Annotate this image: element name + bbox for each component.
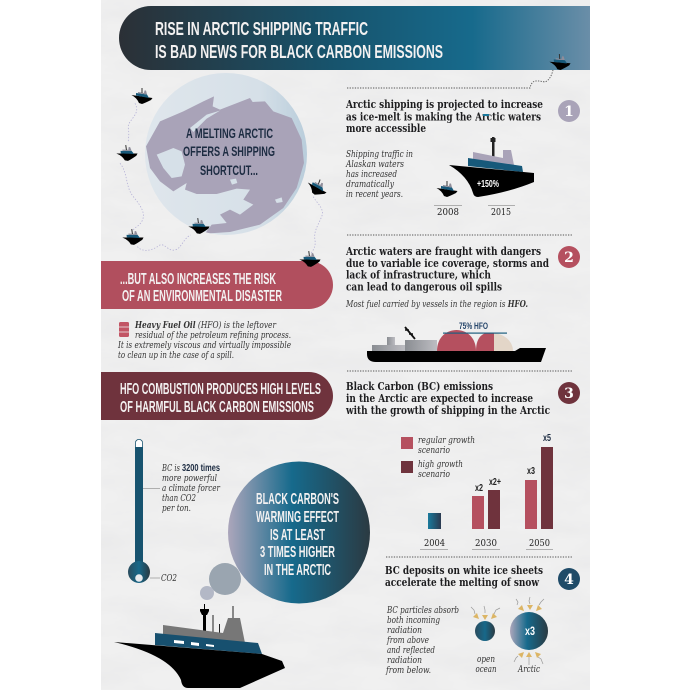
section 3 heading bbox=[345, 380, 550, 417]
thermometer text: more powerful bbox=[162, 474, 217, 484]
section 1 text: Alaskan waters bbox=[345, 160, 404, 170]
HFO explanation bbox=[117, 320, 291, 361]
section 4 text: radiation bbox=[387, 656, 422, 666]
badge 4 bbox=[558, 568, 580, 590]
section 4 heading bbox=[385, 564, 543, 589]
globe map bbox=[145, 73, 307, 235]
callout: warming effect: 3 TIMES HIGHER bbox=[260, 544, 335, 561]
thermometer bbox=[128, 439, 177, 584]
bar chart: x5 bbox=[543, 433, 551, 444]
section 4 heading: accelerate the melting of snow bbox=[385, 576, 539, 589]
badge 1 bbox=[558, 100, 580, 122]
callout: warming effect: IN THE ARCTIC bbox=[264, 562, 331, 579]
section 1 heading: as ice-melt is making the Arctic waters bbox=[346, 110, 541, 124]
section 2 heading: can lead to dangerous oil spills bbox=[346, 280, 502, 294]
section 1 heading: Arctic shipping is projected to increase bbox=[345, 98, 543, 111]
tanker ship bbox=[367, 321, 546, 362]
bar chart: x3 bbox=[527, 466, 535, 477]
icon: ships along route bbox=[115, 53, 571, 246]
thermometer text: a climate forcer bbox=[162, 484, 221, 494]
shipping route bbox=[120, 70, 553, 254]
bar chart legend: scenario bbox=[418, 446, 450, 456]
callout: warming effect: IS AT LEAST bbox=[270, 527, 325, 544]
banner: environmental disaster bbox=[101, 261, 333, 309]
ship on banner bbox=[298, 250, 321, 268]
thermometer text: per ton. bbox=[162, 504, 191, 514]
bar chart legend: regular growth bbox=[418, 436, 475, 446]
banner: black carbon emissions: OF HARMFUL BLACK CARBON EMISSIONS bbox=[120, 399, 314, 416]
section 4 text bbox=[385, 606, 459, 676]
badge 2 bbox=[558, 246, 580, 268]
thermometer: CO2 bbox=[161, 574, 177, 584]
section 4 text: from below. bbox=[385, 666, 431, 676]
globe map: SHORTCUT... bbox=[200, 162, 258, 178]
icon: arctic particle bbox=[510, 597, 548, 675]
thermometer text bbox=[161, 463, 221, 514]
icon: open ocean particle: open bbox=[477, 655, 495, 665]
bar chart legend: high growth bbox=[418, 460, 463, 470]
title banner: RISE IN ARCTIC SHIPPING TRAFFIC bbox=[155, 18, 368, 39]
callout: warming effect: WARMING EFFECT bbox=[256, 509, 339, 526]
section 4 text: radiation bbox=[387, 626, 422, 636]
bar chart bbox=[420, 433, 553, 550]
HFO explanation: residual of the petroleum refining process. bbox=[135, 331, 291, 341]
year labels: 2008 bbox=[437, 208, 459, 218]
title banner bbox=[119, 6, 590, 70]
section 4 text: from above bbox=[386, 636, 429, 646]
icon: arctic particle: x3 bbox=[525, 624, 535, 638]
title banner: IS BAD NEWS FOR BLACK CARBON EMISSIONS bbox=[155, 41, 443, 62]
year labels: 2015 bbox=[491, 208, 511, 218]
callout: warming effect: BLACK CARBON'S bbox=[256, 491, 339, 508]
HFO explanation: It is extremely viscous and virtually impossible bbox=[117, 341, 291, 351]
section 1 text bbox=[345, 150, 413, 200]
big ship 2015 bbox=[449, 137, 534, 197]
icon: open ocean particle bbox=[471, 606, 500, 675]
banner: black carbon emissions bbox=[101, 372, 333, 420]
icon: arctic particle: Arctic bbox=[517, 665, 540, 675]
globe map: A MELTING ARCTIC bbox=[186, 125, 273, 141]
tanker ship: 75% HFO bbox=[459, 321, 488, 332]
year labels bbox=[434, 206, 515, 218]
section 1 text: dramatically bbox=[346, 180, 395, 190]
section 1 text: has increased bbox=[346, 170, 397, 180]
section 1 heading: more accessible bbox=[346, 122, 426, 135]
smoke puffs bbox=[200, 563, 241, 600]
section 3 heading: in the Arctic are expected to increase bbox=[346, 392, 533, 405]
section 3 heading: Black Carbon (BC) emissions bbox=[346, 380, 493, 393]
section 1 text: Shipping traffic in bbox=[346, 150, 413, 160]
banner: environmental disaster: OF AN ENVIRONMENTAL DISASTER bbox=[122, 288, 282, 305]
section 4 text: and reflected bbox=[387, 646, 435, 656]
large icebreaker ship bbox=[114, 604, 285, 688]
section 4 text: both incoming bbox=[387, 616, 440, 626]
bar chart: x2 bbox=[475, 483, 483, 494]
big ship 2015: +150% bbox=[477, 179, 499, 190]
badge 3 bbox=[558, 382, 580, 404]
section 2 heading: due to variable ice coverage, storms and bbox=[346, 257, 549, 270]
HFO explanation: Heavy Fuel Oil (HFO) is the leftover bbox=[134, 320, 277, 331]
bar chart: x2+ bbox=[489, 477, 501, 488]
badge 4: 4 bbox=[564, 572, 574, 588]
bar chart legend bbox=[401, 436, 475, 480]
section 2 heading: Arctic waters are fraught with dangers bbox=[345, 245, 541, 258]
section 2 heading bbox=[345, 245, 549, 294]
bar chart: 2030 bbox=[475, 539, 497, 549]
HFO note: Most fuel carried by vessels in the region is HFO. bbox=[345, 300, 528, 310]
HFO explanation: to clean up in the case of a spill. bbox=[118, 351, 234, 361]
small ship 2008 bbox=[436, 181, 458, 197]
badge 3: 3 bbox=[564, 386, 574, 402]
callout: warming effect bbox=[228, 462, 370, 604]
banner: black carbon emissions: HFO COMBUSTION PRODUCES HIGH LEVELS bbox=[120, 381, 321, 398]
icon: oil barrel bbox=[119, 322, 129, 337]
section 4 heading: BC deposits on white ice sheets bbox=[385, 564, 543, 577]
section 2 heading: lack of infrastructure, which bbox=[346, 268, 491, 282]
icon: open ocean particle: ocean bbox=[476, 665, 497, 675]
badge 2: 2 bbox=[564, 250, 574, 266]
section 4 text: BC particles absorb bbox=[386, 606, 459, 616]
thermometer text: than CO2 bbox=[162, 494, 196, 504]
section 1 heading bbox=[345, 98, 543, 135]
section 1 text: in recent years. bbox=[346, 190, 403, 200]
thermometer text: 3200 times bbox=[182, 463, 220, 474]
badge 1: 1 bbox=[564, 104, 574, 120]
banner: environmental disaster: ...BUT ALSO INCREASES THE RISK bbox=[120, 271, 276, 288]
section 3 heading: with the growth of shipping in the Arctic bbox=[345, 404, 550, 417]
bar chart: 2050 bbox=[529, 539, 550, 549]
thermometer text: BC is bbox=[161, 464, 180, 474]
bar chart legend: scenario bbox=[418, 470, 450, 480]
bar chart: 2004 bbox=[424, 539, 445, 549]
globe map: OFFERS A SHIPPING bbox=[183, 143, 275, 159]
